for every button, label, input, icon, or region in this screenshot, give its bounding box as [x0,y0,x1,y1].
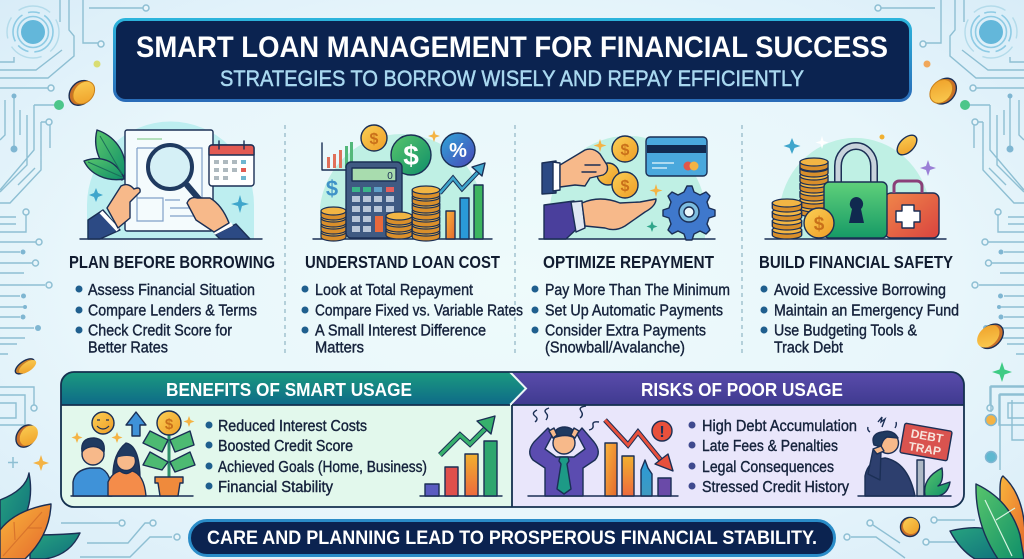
circuit decoration: bottom left [61,520,180,557]
heading: plan: PLAN BEFORE BORROWING [69,252,275,272]
list: benefits: Financial Stability [218,479,333,496]
list: plan: Better Rates [88,340,168,356]
list: repayment: Pay More Than The Minimum [545,282,730,299]
floating coin: bottom right [900,518,920,536]
icon: loan cost, calculator with coins: $ [403,140,419,171]
title: SMART LOAN MANAGEMENT FOR FINANCIAL SUCCESS [136,31,888,64]
list: benefits: Achieved Goals (Home, Business) [218,459,427,476]
list: plan: Check Credit Score for [88,322,232,340]
list: safety: Avoid Excessive Borrowing [774,282,946,299]
panel heading: benefits: BENEFITS OF SMART USAGE [166,380,412,400]
panel heading: risks: RISKS OF POOR USAGE [641,380,843,400]
list: risks [688,418,857,496]
floating coin: left lower [12,420,42,452]
title banner [114,20,910,100]
icon: happy couple and money plant: $ [165,416,174,433]
list: risks: Late Fees & Penalties [702,438,838,455]
floating coin: right middle [973,319,1008,354]
leaves: bottom left [0,473,80,559]
icon: loan cost, calculator with coins: $ [370,131,379,148]
icon: stressed man [528,406,678,496]
floating coin: upper left [64,75,99,111]
subtitle: STRATEGIES TO BORROW WISELY AND REPAY EFFICIENTLY [220,66,804,91]
list: risks: High Debt Accumulation [702,418,857,435]
list: repayment: Consider Extra Payments [545,322,706,340]
icon: repayment, hands and card: $ [621,178,630,195]
icon: planning, magnifier over document [80,122,262,239]
floating coin: upper right [925,73,961,110]
chart: rising bars [420,416,502,496]
footer message banner [190,520,834,556]
panel: risks of poor usage [512,372,964,507]
icon: repayment, hands and card [539,136,715,240]
list: benefits: Boosted Credit Score [218,438,353,455]
column dividers [285,125,742,355]
list: loan cost: Look at Total Repayment [315,282,474,299]
list: loan cost: Compare Fixed vs. Variable Rates [315,302,523,320]
list: safety [760,282,959,356]
icon: loan cost, calculator with coins [313,125,492,241]
list: safety: Track Debt [774,340,844,356]
circuit decoration: right [875,0,1024,425]
list: loan cost: Matters [315,340,364,356]
icon: debt trap sign and worried man: DEBT [910,426,945,446]
icon: loan cost, calculator with coins: 0 [387,171,393,182]
list: plan [76,282,257,356]
heading: safety: BUILD FINANCIAL SAFETY [759,252,953,272]
decorative dots [54,60,970,110]
icon: happy couple and money plant [71,411,195,496]
chart: falling bars: ! [659,424,665,441]
list: loan cost [302,282,523,356]
list: repayment [532,282,730,356]
leaves: bottom right [950,476,1024,559]
icon: safety, padlock, coins and first aid kit [765,132,946,239]
icon: loan cost, calculator with coins: % [449,140,467,162]
circuit decoration: right nodes [986,386,1024,470]
list: safety: Maintain an Emergency Fund [774,302,959,320]
circuit decoration: left [0,0,149,425]
list: repayment: Set Up Automatic Payments [545,302,723,320]
list: risks: Stressed Credit History [702,479,849,496]
list: plan: Compare Lenders & Terms [88,302,257,320]
chart: falling bars [605,420,673,496]
panel: benefits of smart usage [61,372,526,507]
list: repayment: (Snowball/Avalanche) [545,340,685,356]
list: risks: Legal Consequences [702,459,834,476]
list: benefits: Reduced Interest Costs [218,418,367,435]
icon: loan cost, calculator with coins: $ [326,176,338,201]
icon: debt trap sign and worried man: TRAP [907,439,942,459]
circuit decoration: bottom right [844,517,975,558]
list: plan: Assess Financial Situation [88,282,255,299]
icon: safety, padlock, coins and first aid kit: $ [814,214,825,235]
icon: repayment, hands and card: $ [621,142,630,159]
heading: loan cost: UNDERSTAND LOAN COST [305,252,500,272]
heading: repayment: OPTIMIZE REPAYMENT [543,252,714,272]
list: safety: Use Budgeting Tools & [774,322,918,340]
panel outline [61,372,964,507]
floating coin: left middle [13,355,38,378]
list: loan cost: A Small Interest Difference [315,322,486,340]
list: benefits [206,418,427,496]
footer text: CARE AND PLANNING LEAD TO PROSPEROUS FINANCIAL STABILITY. [207,527,817,549]
stars left and right [8,362,1012,471]
icon: debt trap sign and worried man [858,417,952,496]
